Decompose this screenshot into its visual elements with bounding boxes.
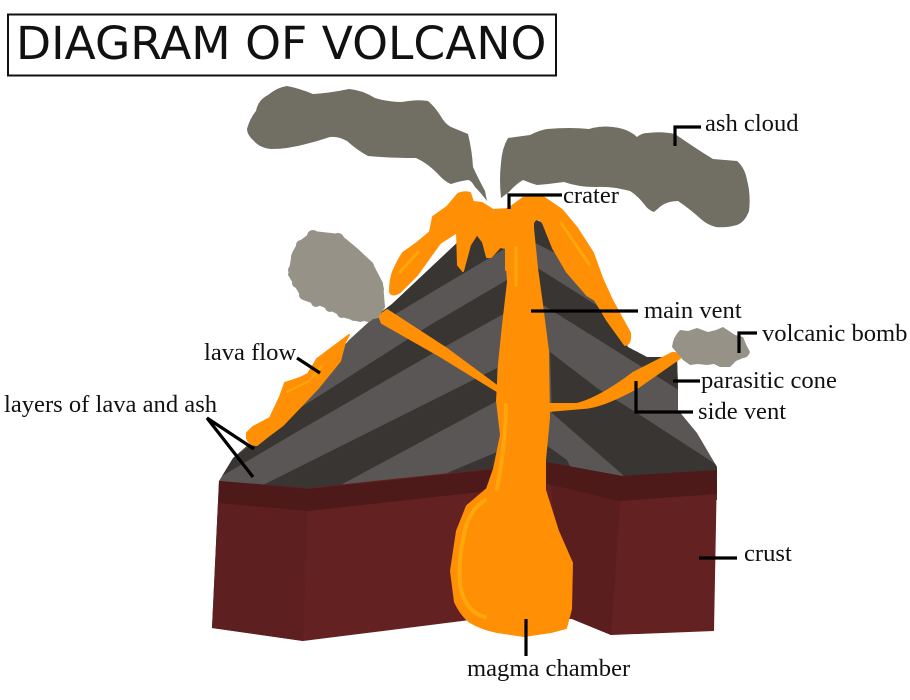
ash plume left <box>247 86 487 201</box>
title box <box>8 14 556 76</box>
label: parasitic cone: parasitic cone <box>701 367 837 394</box>
label: ash cloud: ash cloud <box>705 110 799 137</box>
side vent left <box>379 310 497 391</box>
main vent and magma chamber <box>451 220 572 636</box>
lava flow on slope <box>247 335 349 445</box>
label: main vent: main vent <box>644 297 742 324</box>
lava highlights <box>287 223 589 617</box>
label: volcanic bomb: volcanic bomb <box>762 320 907 347</box>
label: lava flow: lava flow <box>204 339 296 366</box>
rock layers of lava and ash <box>210 205 725 500</box>
label: magma chamber: magma chamber <box>467 655 630 682</box>
label: layers of lava and ash <box>4 391 254 477</box>
ash puff from left side vent <box>288 230 385 322</box>
crust block <box>212 462 717 641</box>
label: lava flow <box>204 339 320 373</box>
label: crater <box>509 182 619 209</box>
label: side vent: side vent <box>698 398 786 425</box>
side vent right <box>548 353 680 411</box>
volcano <box>210 192 725 641</box>
ash cloud right <box>500 126 750 227</box>
label: side vent <box>636 381 786 425</box>
label: layers of lava and ash: layers of lava and ash <box>4 391 217 418</box>
lava cap at crater <box>390 192 630 345</box>
label: crust <box>699 540 792 567</box>
label: ash cloud <box>675 110 799 146</box>
title text: DIAGRAM OF VOLCANO <box>16 17 546 70</box>
label: crust: crust <box>744 540 792 567</box>
volcanic bomb <box>672 327 750 367</box>
label: crater: crater <box>563 182 619 209</box>
